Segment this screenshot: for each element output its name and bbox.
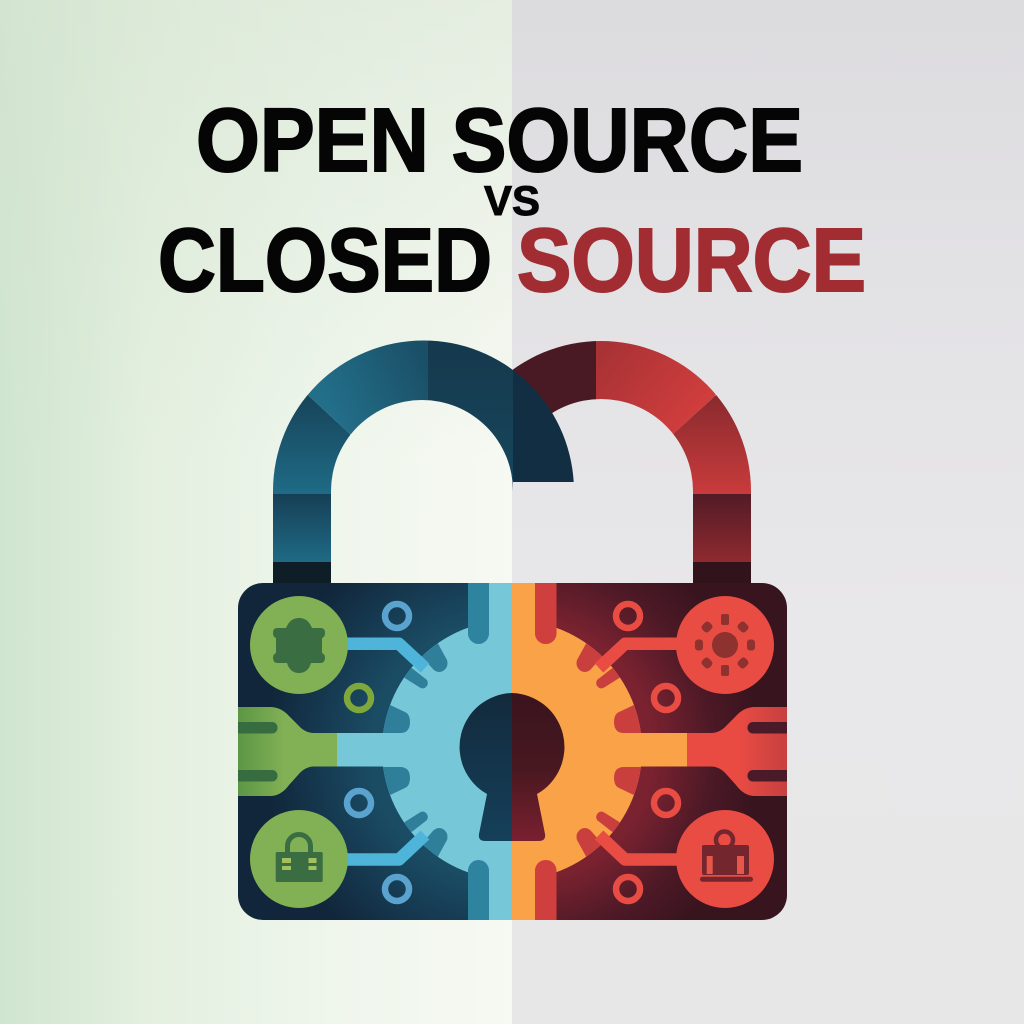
background: closed side bbox=[512, 0, 1024, 1024]
gear notches right bbox=[576, 644, 641, 856]
gear: right orange half bbox=[512, 583, 687, 920]
gear: left blue half bbox=[337, 583, 512, 920]
keyhole right half bbox=[512, 693, 564, 841]
vertical teeth right bbox=[535, 583, 556, 920]
title: vs: VS bbox=[484, 177, 540, 224]
red fork connector bbox=[687, 707, 796, 796]
body right half bbox=[556, 583, 787, 920]
padlock illustration bbox=[230, 320, 796, 944]
body left half bbox=[238, 583, 468, 920]
lock body bbox=[238, 583, 787, 920]
circuit traces left bbox=[345, 644, 425, 860]
green badge: lock icon bbox=[250, 810, 348, 908]
keyhole left half bbox=[460, 693, 512, 841]
vertical teeth left bbox=[468, 583, 489, 920]
green fork connector bbox=[230, 707, 337, 796]
green badge: turtle icon bbox=[250, 596, 348, 694]
background: open side bbox=[0, 0, 512, 1024]
rings left bbox=[347, 604, 409, 901]
shackle: red closed side bbox=[513, 341, 751, 583]
gear notches left bbox=[383, 644, 448, 856]
red badge: sun icon bbox=[676, 596, 774, 694]
rings right bbox=[616, 604, 678, 901]
title word: closed: CLOSED bbox=[158, 211, 492, 311]
title word: source in red: SOURCE bbox=[517, 211, 866, 311]
red badge: bag icon bbox=[676, 810, 774, 908]
title bbox=[158, 91, 866, 311]
shackle: blue open side bbox=[273, 340, 574, 583]
circuit traces right bbox=[599, 644, 679, 860]
title line: open source: OPEN SOURCE bbox=[196, 91, 803, 191]
